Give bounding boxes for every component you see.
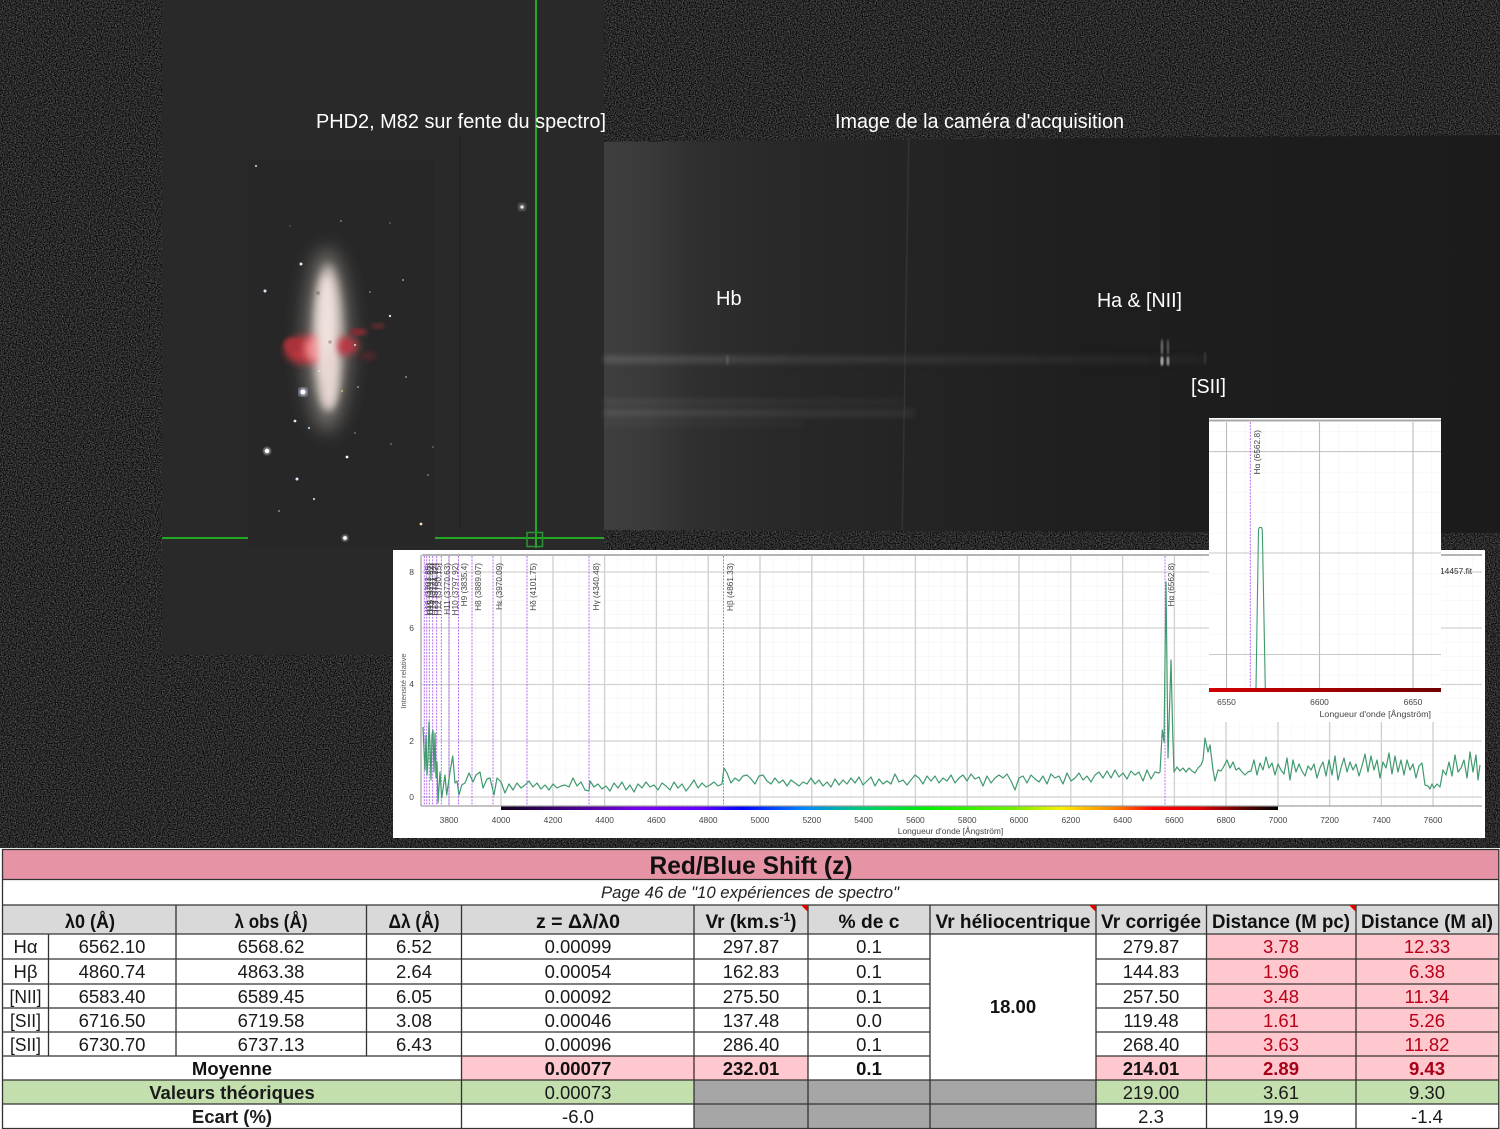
row: H-alpha: 6562.10	[79, 936, 145, 957]
x axis tick labels: 4400	[595, 815, 614, 825]
line labels: Hα (6562.8)	[1167, 563, 1176, 606]
line labels: H8 (3889.07)	[474, 563, 483, 611]
header row: Vr corrigée	[1101, 912, 1201, 933]
row: Moyenne: 0.1	[856, 1058, 882, 1079]
row: H-alpha: 0.00099	[545, 936, 611, 957]
field stars	[255, 165, 526, 542]
noisy sky background	[0, 0, 1500, 850]
row: H-beta: 144.83	[1123, 961, 1179, 982]
line labels: H16 (3703.85)	[424, 563, 433, 615]
y axis title: Intensité relative	[399, 653, 408, 709]
x axis tick labels: 5800	[958, 815, 977, 825]
row: H-beta: Hβ	[13, 961, 38, 982]
y axis labels	[409, 567, 414, 802]
header row: -1	[779, 910, 790, 924]
line labels: H9 (3835.4)	[460, 563, 469, 606]
label: Hb: Hb	[716, 288, 742, 310]
filename: 14457.fit	[1440, 566, 1473, 576]
header row: Vr héliocentrique	[936, 912, 1090, 933]
inset tick labels: 6550	[1217, 697, 1236, 707]
row: SII 6716: 119.48	[1123, 1010, 1179, 1031]
x axis tick labels: 6800	[1217, 815, 1236, 825]
y axis labels: 2	[409, 736, 414, 746]
row: H-beta: 2.64	[396, 961, 432, 982]
heliocentric velocity value: 18.00	[990, 996, 1036, 1017]
row: SII 6730: 6737.13	[238, 1034, 304, 1055]
inset x axis title: Longueur d'onde [Ångström]	[1320, 709, 1431, 719]
header row: λ obs (Å)	[234, 912, 308, 933]
row: NII: 6583.40	[79, 986, 145, 1007]
row: SII 6730: 268.40	[1123, 1034, 1179, 1055]
inset tick labels: 6600	[1310, 697, 1329, 707]
header row: Δλ (Å)	[388, 912, 440, 933]
row: H-alpha: Hα	[13, 936, 38, 957]
row: NII: 0.00092	[545, 986, 611, 1007]
label: PHD2: PHD2, M82 sur fente du spectro]	[316, 111, 606, 133]
chart: full spectrum	[393, 550, 1485, 838]
row: SII 6716: 3.08	[396, 1010, 432, 1031]
x axis tick labels: 6600	[1165, 815, 1184, 825]
row: H-alpha: 0.1	[856, 936, 882, 957]
row: NII: 3.48	[1263, 986, 1299, 1007]
row: NII	[10, 986, 1449, 1007]
row: Ecart: 2.3	[1138, 1106, 1164, 1127]
panel: PHD2 guiding image with M82	[162, 0, 604, 655]
x axis title: Longueur d'onde [Ångström]	[898, 826, 1003, 836]
line labels: H14 (3721.94)	[428, 563, 438, 615]
row: SII 6730: 286.40	[723, 1034, 779, 1055]
row: SII 6716: 1.61	[1263, 1010, 1299, 1031]
line labels: H12 (3750.15)	[434, 563, 443, 615]
row: H-beta: 0.1	[856, 961, 882, 982]
x axis tick labels: 3800	[440, 815, 459, 825]
row: H-beta: 162.83	[723, 961, 779, 982]
row: Valeurs theoriques	[149, 1082, 1445, 1103]
line labels: Hβ (4861.33)	[726, 563, 735, 611]
row: H-alpha: 6568.62	[238, 936, 304, 957]
x axis tick labels: 5600	[906, 815, 925, 825]
row: H-alpha: 279.87	[1123, 936, 1179, 957]
row: Valeurs theoriques: 0.00073	[545, 1082, 611, 1103]
label: acquisition camera: Image de la caméra d'acquisition	[835, 111, 1124, 133]
table subtitle: Page 46 de "10 expériences de spectro"	[601, 884, 900, 902]
row: SII 6730: 11.82	[1405, 1034, 1449, 1055]
row: Ecart: 19.9	[1263, 1106, 1299, 1127]
row: SII 6730: 6730.70	[79, 1034, 145, 1055]
row: SII 6730: 0.00096	[545, 1034, 611, 1055]
row: H-beta: 4863.38	[238, 961, 304, 982]
table title: Red/Blue Shift (z)	[650, 852, 852, 880]
row: SII 6716: 0.0	[856, 1010, 882, 1031]
emission spots: Hb, Ha, NII, SII	[726, 339, 1207, 366]
grid lines	[2, 849, 1499, 1129]
inset line label: Hα (6562.8)	[1252, 430, 1262, 474]
header row: Distance (M al)	[1361, 912, 1493, 933]
row: Moyenne: 9.43	[1409, 1058, 1445, 1079]
row: Valeurs theoriques: 219.00	[1123, 1082, 1179, 1103]
row: SII 6730: 0.1	[856, 1034, 882, 1055]
header row: Vr (km.s	[706, 912, 779, 933]
row: Valeurs theoriques: 9.30	[1409, 1082, 1445, 1103]
row: NII: [NII]	[10, 986, 42, 1007]
row: H-beta: 1.96	[1263, 961, 1299, 982]
header row: Distance (M pc)	[1212, 912, 1350, 933]
line labels: H15 (3711.97)	[426, 563, 435, 615]
row: NII: 6.05	[396, 986, 432, 1007]
x axis tick labels: 6000	[1010, 815, 1029, 825]
panel: acquisition camera spectrum image	[604, 135, 1500, 533]
wavelength colour bar	[501, 807, 1278, 810]
row: SII 6730: 3.63	[1263, 1034, 1299, 1055]
row: H-alpha: 6.52	[396, 936, 432, 957]
row: H-beta	[13, 961, 1445, 982]
inset tick labels: 6650	[1404, 697, 1423, 707]
x axis tick labels: 7200	[1320, 815, 1339, 825]
header row: % de c	[838, 912, 900, 933]
row: SII 6730: [SII]	[10, 1034, 41, 1055]
row: SII 6716: 0.00046	[545, 1010, 611, 1031]
galaxy M82	[284, 248, 385, 432]
row: H-beta: 6.38	[1409, 961, 1445, 982]
table: Red/Blue Shift	[0, 848, 1500, 1129]
emission line markers	[424, 556, 1165, 806]
row: SII 6730	[10, 1034, 1449, 1055]
row: Ecart	[192, 1106, 1443, 1127]
row: Moyenne: Moyenne	[192, 1058, 272, 1079]
row: H-alpha	[13, 936, 1450, 957]
y axis labels: 0	[409, 792, 414, 802]
y axis labels: 6	[409, 623, 414, 633]
x axis tick labels: 7000	[1269, 815, 1288, 825]
x axis tick labels: 4800	[699, 815, 718, 825]
inset: zoom on H-alpha line	[1209, 418, 1441, 722]
x axis tick labels: 5000	[751, 815, 770, 825]
inset colour bar	[1209, 688, 1441, 692]
row: SII 6716: 137.48	[723, 1010, 779, 1031]
line labels: Hδ (4101.75)	[529, 563, 538, 611]
x axis tick labels	[440, 815, 1443, 825]
row: Valeurs theoriques: 3.61	[1263, 1082, 1299, 1103]
x axis tick labels: 4200	[544, 815, 563, 825]
x axis tick labels: 4600	[647, 815, 666, 825]
label: SII: [SII]	[1191, 376, 1226, 398]
row: Moyenne	[192, 1058, 1445, 1079]
row: H-beta: 0.00054	[545, 961, 611, 982]
row: NII: 6589.45	[238, 986, 304, 1007]
major grid	[422, 572, 1482, 797]
slit shadow line	[460, 135, 461, 527]
row: Moyenne: 2.89	[1263, 1058, 1299, 1079]
row: Moyenne: 0.00077	[545, 1058, 611, 1079]
spectrum trace	[423, 582, 1480, 803]
row: Ecart: -1.4	[1411, 1106, 1443, 1127]
line labels	[424, 563, 1176, 615]
x axis tick labels: 7600	[1424, 815, 1443, 825]
row: H-beta: 4860.74	[79, 961, 145, 982]
row: Moyenne: 214.01	[1123, 1058, 1179, 1079]
y axis labels: 4	[409, 679, 414, 689]
row: Valeurs theoriques: Valeurs théoriques	[149, 1082, 315, 1103]
row: SII 6716: [SII]	[10, 1010, 41, 1031]
row: SII 6716: 6716.50	[79, 1010, 145, 1031]
row: SII 6716: 5.26	[1409, 1010, 1445, 1031]
x axis tick labels: 5200	[802, 815, 821, 825]
header row: )	[790, 912, 796, 933]
inset tick labels	[1217, 697, 1423, 707]
row: H-alpha: 297.87	[723, 936, 779, 957]
label: Ha and NII: Ha & [NII]	[1097, 290, 1182, 312]
line labels: Hε (3970.09)	[495, 563, 504, 610]
y axis labels: 8	[409, 567, 414, 577]
x axis tick labels: 7400	[1372, 815, 1391, 825]
x axis tick labels: 6200	[1061, 815, 1080, 825]
x axis tick labels: 5400	[854, 815, 873, 825]
row: Moyenne: 232.01	[723, 1058, 779, 1079]
row: Ecart: Ecart (%)	[192, 1106, 272, 1127]
inset peak	[1256, 528, 1265, 688]
row: NII: 0.1	[856, 986, 882, 1007]
row: SII 6716	[10, 1010, 1445, 1031]
row: SII 6730: 6.43	[396, 1034, 432, 1055]
cell fills	[3, 850, 1499, 1128]
comment markers	[801, 905, 1356, 912]
guiding crosshair	[162, 0, 604, 548]
header row: λ0 (Å)	[65, 912, 115, 933]
line labels: Hγ (4340.48)	[592, 563, 601, 610]
row: NII: 11.34	[1405, 986, 1449, 1007]
line labels: H13 (3734.37)	[431, 563, 440, 615]
line labels: H11 (3770.63)	[443, 563, 452, 615]
row: Ecart: -6.0	[562, 1106, 594, 1127]
row: NII: 257.50	[1123, 986, 1179, 1007]
x axis tick labels: 6400	[1113, 815, 1132, 825]
header row	[65, 910, 1493, 933]
x axis tick labels: 4000	[492, 815, 511, 825]
row: H-alpha: 12.33	[1404, 936, 1450, 957]
header row: z = Δλ/λ0	[536, 912, 620, 933]
row: SII 6716: 6719.58	[238, 1010, 304, 1031]
row: NII: 275.50	[723, 986, 779, 1007]
line labels: H10 (3797.92)	[451, 563, 460, 615]
row: H-alpha: 3.78	[1263, 936, 1299, 957]
